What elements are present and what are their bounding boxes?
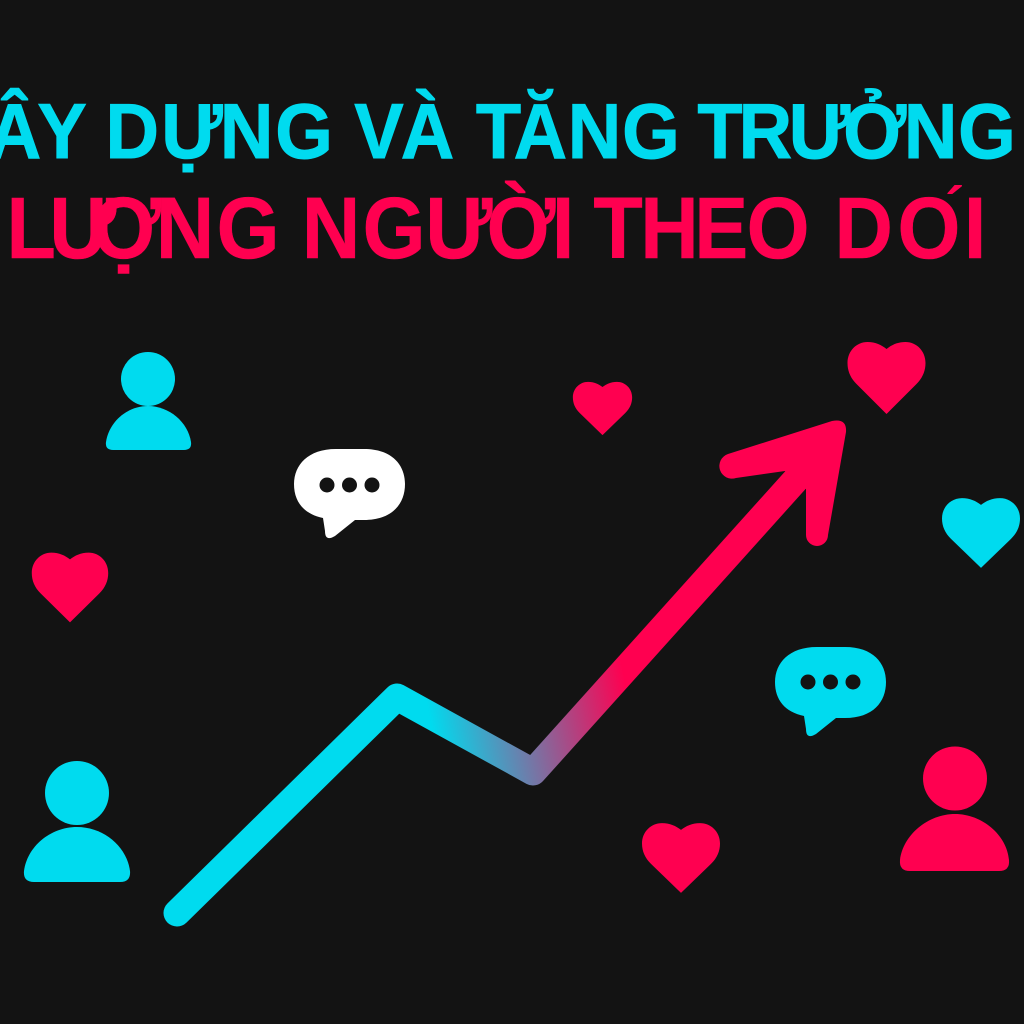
icon: heart bottom bbox=[642, 823, 720, 893]
title line 2: ´ bbox=[945, 176, 964, 241]
title line 1: ÂY DỰNG VÀ TĂNG TRƯỞNG bbox=[0, 87, 1016, 175]
icon: heart cyan right bbox=[942, 498, 1020, 568]
icon: white chat bubble bbox=[294, 449, 405, 538]
icon: user cyan bottom bbox=[24, 761, 130, 882]
growth arrow bbox=[177, 420, 846, 913]
icon: heart left bbox=[32, 553, 108, 622]
title line 2: LƯỢNG NGƯỜI THEO DOI bbox=[7, 179, 986, 277]
icon: user cyan top bbox=[106, 352, 191, 450]
icon: heart top right bbox=[848, 342, 926, 414]
icon: heart top small bbox=[573, 382, 632, 435]
icon: user red bbox=[900, 746, 1009, 871]
icon: cyan chat bubble bbox=[775, 647, 886, 736]
